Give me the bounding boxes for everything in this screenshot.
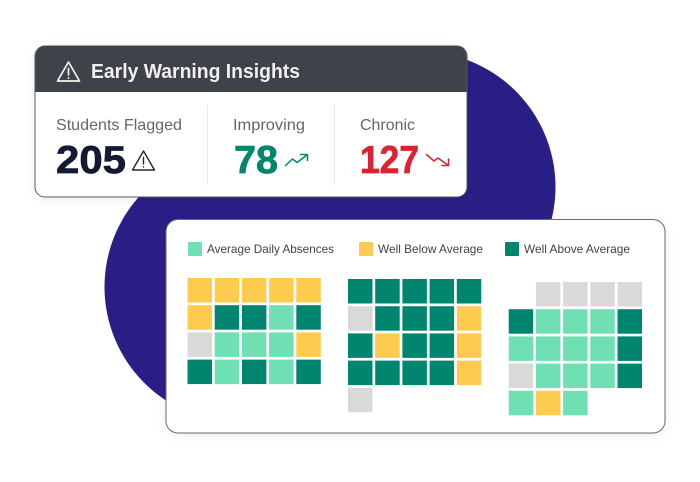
icon: trend up arrow xyxy=(286,154,308,166)
grid: first heatmap xyxy=(188,278,321,384)
panel: absences heatmap xyxy=(166,220,665,433)
card header bar xyxy=(36,46,466,92)
card background xyxy=(166,220,665,433)
metric: students flagged xyxy=(56,117,182,182)
legend: Average Daily Absences xyxy=(207,242,334,256)
metric: improving xyxy=(233,117,308,182)
grid: third heatmap xyxy=(509,282,642,415)
metric: students flagged: Students Flagged xyxy=(56,117,182,134)
icon: warning xyxy=(132,151,154,170)
metric: students flagged: 205 xyxy=(56,139,126,182)
grid: second heatmap xyxy=(348,279,481,412)
heading: Early Warning Insights xyxy=(91,61,300,83)
icon: trend down arrow xyxy=(426,154,448,166)
legend: Well Above Average xyxy=(524,242,630,256)
icon: header warning xyxy=(58,62,80,81)
metric: improving: Improving xyxy=(233,117,305,134)
metric: chronic xyxy=(360,117,448,182)
metric: chronic: Chronic xyxy=(360,117,415,134)
panel: early warning insights xyxy=(35,46,467,197)
card background xyxy=(35,46,467,197)
legend xyxy=(188,242,630,256)
metric: chronic: 127 xyxy=(360,139,419,182)
metric: improving: 78 xyxy=(234,139,278,182)
legend: Well Below Average xyxy=(378,242,483,256)
background blob xyxy=(240,187,420,287)
